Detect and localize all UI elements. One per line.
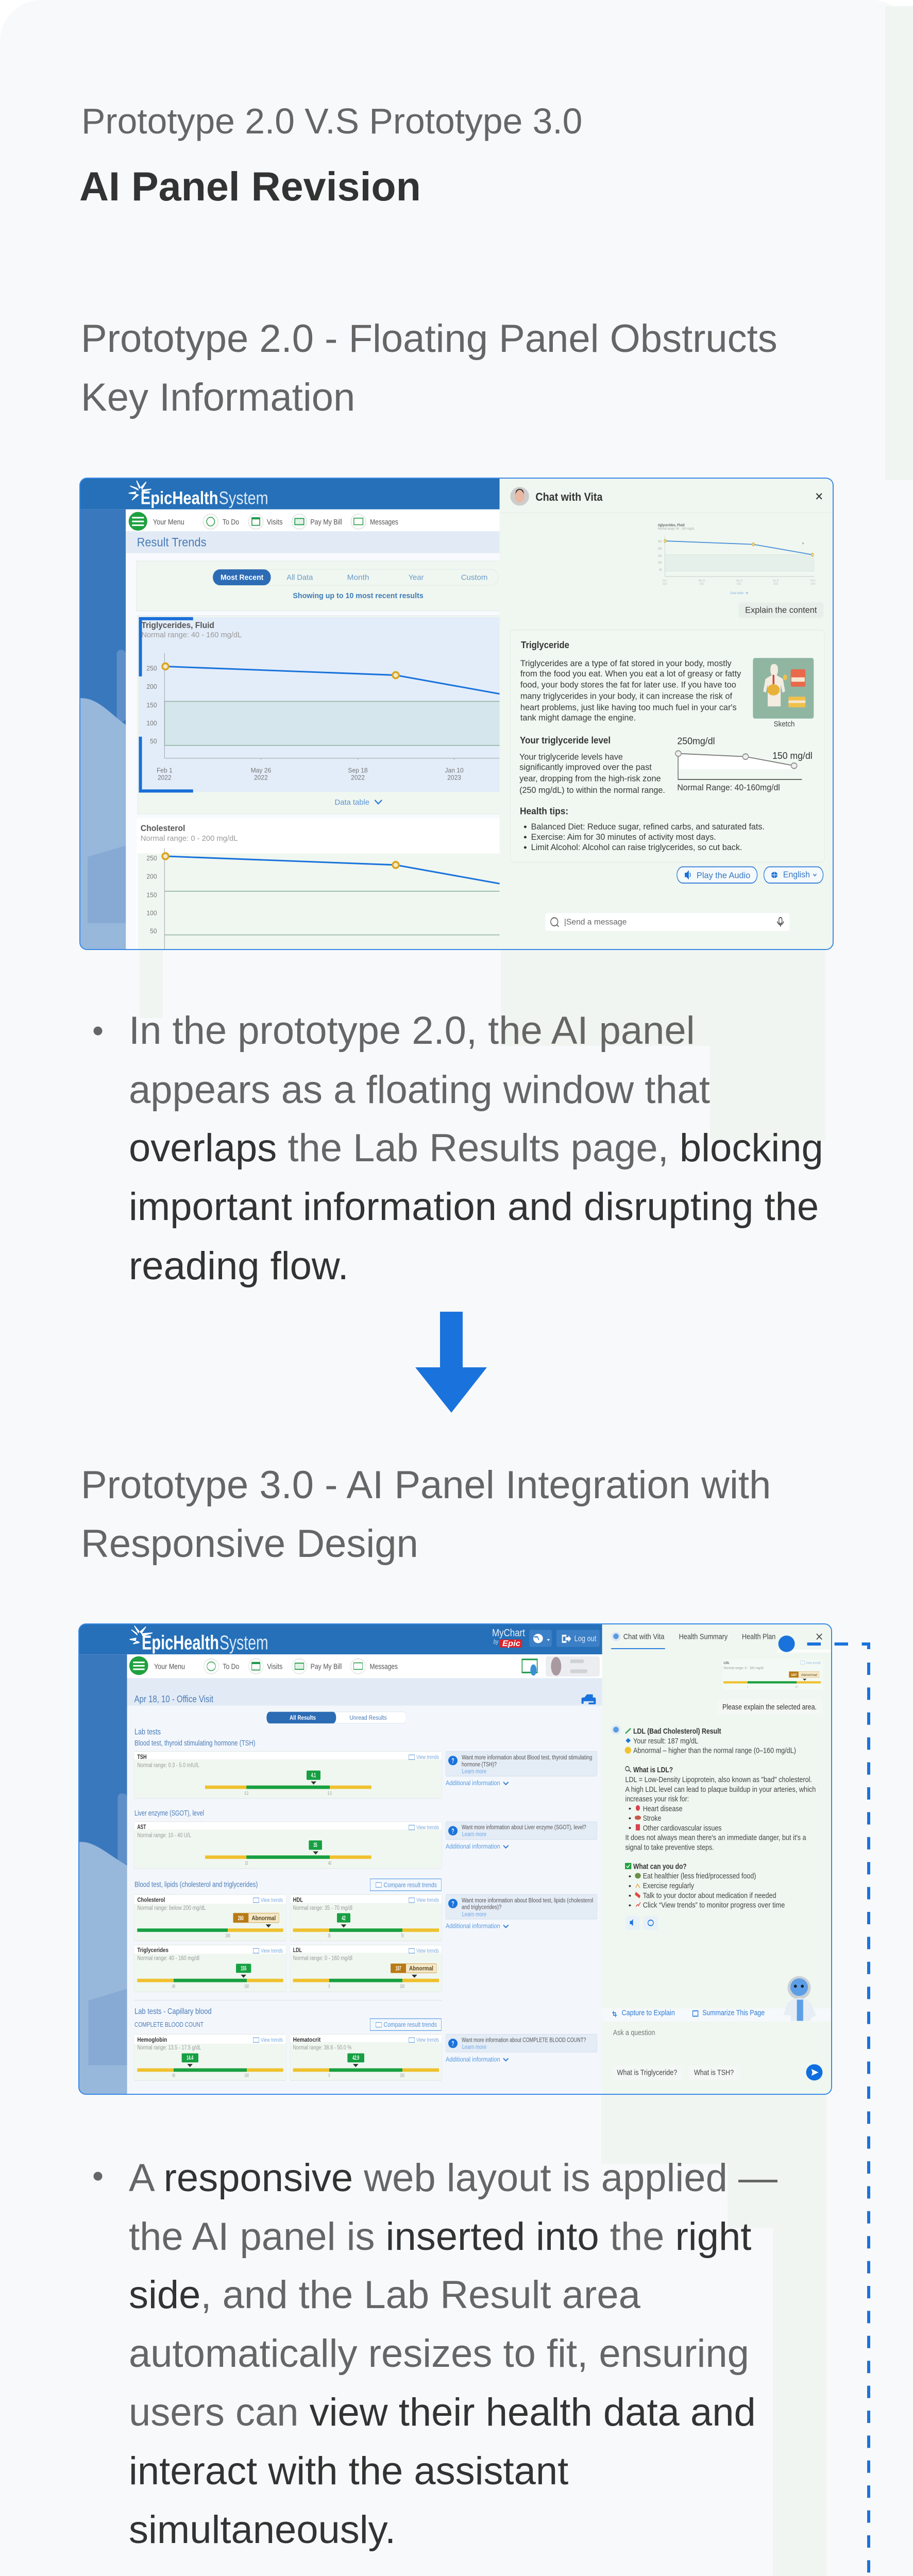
info box: lipids: ? <box>452 1900 454 1908</box>
assistant response: Talk to your doctor about medication if needed <box>643 1891 776 1900</box>
lab results page, left part: Liver enzyme (SGOT), level <box>134 1809 204 1818</box>
bullet text: prototype 2.0: reading flow. <box>129 1244 349 1288</box>
selected chart thumbnail: Normal range: 40 - 160 mg/dL <box>658 528 695 531</box>
triglycerides chart card: Feb 1 <box>157 766 173 774</box>
question input: What is Triglyceride? <box>617 2068 677 2077</box>
mini trend chart: 250mg/dl <box>677 736 715 747</box>
logo: System <box>219 1632 268 1654</box>
audio and language buttons: Play the Audio <box>697 871 750 880</box>
selected LDL thumbnail: Normal range: 0 - 160 mg/dl <box>724 1667 764 1670</box>
card: cholesterol: Cholesterol <box>137 1897 165 1904</box>
card: cholesterol: Normal range: below 200 mg/dL <box>137 1905 206 1912</box>
explanation card: tank might damage the engine. <box>520 714 636 723</box>
card: AST: 35 <box>313 1842 317 1849</box>
card: hemoglobin: 14.4 <box>187 2055 194 2062</box>
user bubble: Please explain the selected area. <box>722 1703 817 1711</box>
bullet text: prototype 2.0 <box>94 1009 823 1288</box>
cholesterol chart card: 200 <box>146 872 157 880</box>
info box: lipids: Learn more <box>462 1911 486 1918</box>
explanation card: Balanced Diet: Reduce sugar, refined carbs, and saturated fats. <box>531 822 765 832</box>
assistant response: Click “View trends” to monitor progress over time <box>643 1901 785 1909</box>
tabs <box>611 1632 831 1653</box>
explanation card: Your triglyceride level <box>520 736 611 746</box>
title block: AI Panel Revision <box>79 163 421 209</box>
assistant response: LDL = Low-Density Lipoprotein, also known as "bad" cholesterol. <box>625 1775 812 1784</box>
heading: prototype 3.0 <box>81 1463 771 1566</box>
info box: TSH: Additional information <box>446 1780 500 1787</box>
sketch illustration <box>753 658 814 719</box>
card: hemoglobin: Normal range: 13.5 - 17.5 g/dL <box>137 2044 201 2052</box>
date filter: Year <box>409 573 424 582</box>
cholesterol chart card: 150 <box>146 891 157 899</box>
selected chart thumbnail: Feb 1 <box>810 579 816 583</box>
triglycerides chart card <box>138 616 502 814</box>
triglycerides chart card: 100 <box>146 719 157 727</box>
info box: lipids: Want more information about Blood test, lipids (cholesterol <box>462 1897 593 1904</box>
lab results page, left part: Blood test, lipids (cholesterol and triglycerides) <box>134 1880 258 1889</box>
triglycerides chart card: 2023 <box>447 773 461 782</box>
selected chart thumbnail: 2022 <box>700 582 704 586</box>
navigation: Pay My Bill <box>311 1663 342 1671</box>
audio and language buttons: English <box>783 870 810 880</box>
explanation card: significantly improved over the past <box>519 763 652 772</box>
assistant response: A high LDL level can lead to plaque buildup in your arteries, which <box>625 1785 816 1793</box>
selected LDL thumbnail: 0 <box>747 1685 749 1688</box>
card: TSH: TSH <box>137 1754 147 1761</box>
cholesterol chart card <box>137 819 502 953</box>
triglycerides chart card: Sep 18 <box>348 766 368 774</box>
explanation card: Triglyceride <box>521 640 569 650</box>
info box: SGOT <box>446 1822 597 1851</box>
triglycerides chart card: 200 <box>146 683 157 690</box>
view trend links: View trends <box>416 1824 439 1831</box>
card: hemoglobin: 160 <box>244 2073 249 2078</box>
selected LDL thumbnail: 160 <box>795 1685 798 1688</box>
navigation: Pay My Bill <box>310 517 342 526</box>
card: TSH: 5.0 <box>328 1790 332 1796</box>
heading: prototype 3.0: Responsive Design <box>81 1522 418 1566</box>
card: cholesterol: View trends <box>261 1897 283 1903</box>
navigation: To Do <box>223 517 239 526</box>
assistant response: Other cardiovascular issues <box>643 1824 721 1832</box>
card: LDL: Normal range: 0 - 160 mg/dl <box>293 1955 352 1962</box>
selected chart thumbnail: Sep 18 <box>736 579 742 583</box>
card: hematocrit: 42.9 <box>352 2055 360 2062</box>
heading: prototype 2.0: Prototype 2.0 - Floating Panel Obstructs <box>81 317 777 361</box>
navigation: To Do <box>223 1663 240 1671</box>
card: hematocrit: Hematocrit <box>293 2037 321 2044</box>
print icon <box>582 1694 596 1704</box>
info box: lipids: Additional information <box>446 1922 500 1930</box>
assistant response: LDL (Bad Cholesterol) Result <box>633 1727 721 1736</box>
floating chat panel <box>500 478 835 951</box>
card: AST: 40 <box>328 1860 331 1866</box>
navigation: Messages <box>370 517 398 526</box>
mini trend chart: Normal Range: 40-160mg/dl <box>677 783 780 793</box>
info box: TSH: hormone (TSH)? <box>462 1761 497 1768</box>
user request bubble <box>746 607 817 615</box>
selected chart thumbnail: riglycerides, Fluid <box>658 523 685 528</box>
info box: lipids <box>446 1894 597 1930</box>
card: LDL: 187 <box>395 1965 401 1972</box>
card: TSH: 4.1 <box>311 1772 316 1779</box>
results toggle: All Results <box>290 1715 316 1722</box>
compare buttons: Compare result trends <box>384 1882 437 1889</box>
card: hematocrit: Normal range: 38.8 - 50.0 % <box>293 2044 352 2052</box>
card: HDL: View trends <box>416 1897 439 1903</box>
integrated chat panel <box>582 1624 833 2096</box>
mini trend chart: 150 mg/dl <box>772 751 813 761</box>
selected chart thumbnail: Data table <box>730 591 743 595</box>
question input <box>611 2028 822 2080</box>
card: cholesterol <box>134 1894 286 1941</box>
card: hematocrit: 160 <box>400 2073 405 2078</box>
cholesterol chart card: 100 <box>146 909 157 917</box>
selected chart thumbnail: May 26 <box>699 579 705 583</box>
selected LDL thumbnail: LDL <box>724 1662 730 1665</box>
heading: prototype 2.0: Key Information <box>81 376 355 419</box>
card: AST: Normal range: 10 - 40 U/L <box>137 1832 192 1839</box>
card: hematocrit <box>290 2035 442 2080</box>
tabs: Chat with Vita <box>623 1633 665 1641</box>
explanation card: Your triglyceride levels have <box>519 753 623 762</box>
assistant response: What is LDL? <box>633 1766 673 1774</box>
selected chart thumbnail: 100 <box>658 562 662 565</box>
info box: TSH: Want more information about Blood test, thyroid stimulating <box>462 1754 592 1761</box>
screenshot: prototype 2.0 floating panel <box>80 478 835 953</box>
mini trend chart <box>675 736 813 793</box>
assistant response: Heart disease <box>643 1804 683 1813</box>
results toggle: Unread Results <box>349 1715 387 1722</box>
explanation card: Limit Alcohol: Alcohol can raise triglycerides, so cut back. <box>531 843 742 852</box>
lab results page, right part <box>370 1626 600 2063</box>
selected chart thumbnail: 150 <box>658 554 662 558</box>
assistant response: Abnormal – higher than the normal range (0–160 mg/dL) <box>633 1747 796 1755</box>
mychart logo: Epic <box>502 1638 520 1648</box>
user bubble <box>717 1699 823 1715</box>
compare buttons <box>370 1879 441 2030</box>
screenshot: prototype 3.0 integrated panel <box>79 1624 833 2096</box>
card: LDL: 160 <box>400 1984 405 1989</box>
explanation card <box>510 630 824 862</box>
lab results page, left part: COMPLETE BLOOD COUNT <box>134 2021 204 2029</box>
question input: Ask a question <box>613 2028 655 2037</box>
navigation: Visits <box>267 517 283 526</box>
card: hemoglobin: 40 <box>172 2073 175 2078</box>
assistant response <box>612 1725 816 1930</box>
bullet text: prototype 3.0: the AI panel is inserted into the right <box>129 2215 751 2259</box>
language and log out buttons: Log out <box>574 1634 597 1643</box>
mychart logo: by <box>494 1639 499 1646</box>
bullet text: prototype 3.0: users can view their health data and <box>129 2391 756 2434</box>
selected chart thumbnail: 200 <box>658 547 662 551</box>
selected chart thumbnail: Jan 10 <box>773 579 779 583</box>
explanation card: Sketch <box>774 720 794 728</box>
assistant response: Exercise regularly <box>643 1882 695 1890</box>
info box: TSH: Learn more <box>462 1768 486 1775</box>
date filter <box>137 561 501 611</box>
info box: SGOT: Additional information <box>446 1843 500 1851</box>
lab results page, left part: Apr 18, 10 - Office Visit <box>134 1694 213 1705</box>
compare buttons: Compare result trends <box>384 2021 437 2029</box>
cholesterol chart card: 250 <box>146 854 157 862</box>
audio and language buttons <box>677 867 823 883</box>
selected chart thumbnail: 50 <box>660 569 662 572</box>
QR and profile <box>518 1656 600 1676</box>
screenshot 2 border <box>79 1624 832 2094</box>
navigation <box>129 1656 398 1675</box>
navigation: Messages <box>370 1663 398 1671</box>
title block: Prototype 2.0 V.S Prototype 3.0 <box>81 101 582 141</box>
screenshot 1 border <box>80 478 833 950</box>
results toggle <box>266 1712 406 1723</box>
card: triglycerides: Triglycerides <box>137 1947 169 1954</box>
explanation card: heart problems, just like having too much fuel in your car's <box>520 703 737 713</box>
card: hematocrit: 0 <box>329 2073 330 2078</box>
info box: lipids: and triglycerides)? <box>462 1904 502 1911</box>
explanation card: Exercise: Aim for 30 minutes of activity most days. <box>531 833 716 842</box>
triglycerides chart card: 250 <box>146 664 157 672</box>
question input: What is TSH? <box>694 2068 734 2077</box>
card: hematocrit: View trends <box>416 2037 439 2043</box>
chat header: Chat with Vita <box>535 491 603 504</box>
assistant response: It does not always mean there's an immediate danger, but it's a <box>625 1834 806 1842</box>
triglycerides chart card: 2022 <box>254 773 268 782</box>
info box: complete blood count: Additional information <box>446 2056 500 2063</box>
logo: EpicHealth <box>141 488 218 509</box>
assistant response: Your result: 187 mg/dL <box>633 1737 698 1745</box>
date filter: Month <box>347 573 369 582</box>
heading: prototype 2.0 <box>81 317 777 419</box>
capture and summarize actions <box>612 2009 765 2017</box>
card: triglycerides <box>134 1945 286 1992</box>
info box: SGOT: ? <box>452 1827 454 1836</box>
assistant response: What can you do? <box>633 1862 687 1871</box>
card: LDL: LDL <box>293 1947 302 1954</box>
bullet text: prototype 3.0: interact with the assistant <box>129 2449 568 2493</box>
card: TSH: 0.3 <box>245 1790 248 1796</box>
capture and summarize actions: Capture to Explain <box>622 2009 675 2017</box>
lab results page, left part <box>79 1624 643 2095</box>
logo <box>130 1625 268 1654</box>
info box: complete blood count <box>446 2035 597 2063</box>
triglycerides chart card: 150 <box>146 701 157 709</box>
bullet text: prototype 3.0: side, and the Lab Result area <box>129 2273 641 2317</box>
explanation card: food, your body stores the fat for later use. If you have too <box>520 681 736 690</box>
lab results page, left part: Lab tests <box>134 1726 161 1736</box>
date filter: All Data <box>286 573 313 582</box>
chat header <box>510 487 822 505</box>
navigation: Visits <box>267 1663 282 1671</box>
info box: complete blood count: ? <box>452 2040 454 2048</box>
explanation card: (250 mg/dL) to within the normal range. <box>519 786 665 795</box>
card: cholesterol: 260 <box>238 1915 244 1922</box>
navigation: Your Menu <box>154 1663 185 1671</box>
navigation <box>129 512 398 549</box>
bullet text: prototype 2.0: appears as a floating window that <box>129 1068 710 1112</box>
info box: complete blood count: Want more information about COMPLETE BLOOD COUNT? <box>462 2037 586 2044</box>
explanation card: many triglycerides in your body, it can increase the risk of <box>520 692 733 701</box>
heading: prototype 3.0: Prototype 3.0 - AI Panel Integration with <box>81 1463 771 1507</box>
title block <box>79 101 582 209</box>
explanation card: Health tips: <box>520 807 568 817</box>
card: AST: AST <box>137 1824 146 1831</box>
explanation card: year, dropping from the high-risk zone <box>519 774 661 784</box>
info box: SGOT: Learn more <box>462 1831 486 1838</box>
bullet text: prototype 3.0: A responsive web layout is applied — <box>129 2156 777 2200</box>
explanation card: from the food you eat. When you eat a lot of greasy or fatty <box>520 669 741 679</box>
selected chart thumbnail: Feb 1 <box>662 579 668 583</box>
selected LDL thumbnail: View trends <box>806 1662 821 1665</box>
bullet text: prototype 3.0 <box>94 2156 777 2552</box>
lab results page, left part: Lab tests - Capillary blood <box>134 2006 212 2016</box>
selected chart thumbnail: 2023 <box>773 582 778 586</box>
selected chart thumbnail: 2022 <box>663 582 667 586</box>
navigation: Result Trends <box>137 535 207 549</box>
triglycerides chart card: 50 <box>150 737 157 745</box>
cholesterol chart card: 50 <box>150 927 157 935</box>
mychart logo: MyChart <box>492 1626 525 1639</box>
assistant response: Stroke <box>643 1814 661 1823</box>
card: HDL: 70 <box>401 1933 404 1939</box>
connector: dashed arrow from panel tab to health plan <box>779 1636 870 2576</box>
card: hemoglobin <box>134 2035 286 2080</box>
triglycerides chart card: 2022 <box>351 773 365 782</box>
card: cholesterol: Abnormal <box>251 1915 276 1922</box>
card: AST <box>134 1822 442 1869</box>
triglycerides chart card: Jan 10 <box>445 766 464 774</box>
date filter: Most Recent <box>221 573 264 582</box>
card: triglycerides: Normal range: 40 - 160 mg/dl <box>137 1955 199 1962</box>
triglycerides chart card: 2022 <box>158 773 172 782</box>
mychart logo <box>492 1626 525 1648</box>
bullet text: prototype 2.0: In the prototype 2.0, the AI panel <box>129 1009 695 1053</box>
navigation: Your Menu <box>153 517 184 526</box>
card: LDL <box>290 1945 442 1992</box>
assistant response: Eat healthier (less fried/processed food) <box>643 1872 756 1880</box>
assistant response: increases your risk for: <box>625 1795 689 1803</box>
logo: System <box>219 488 268 509</box>
bottom action band <box>602 2008 832 2022</box>
card: HDL: 42 <box>342 1915 346 1922</box>
explanation card: Triglycerides are a type of fat stored in your body, mostly <box>520 659 732 669</box>
bullet text: prototype 3.0: automatically resizes to fit, ensuring <box>129 2332 749 2376</box>
arrow: down <box>415 1312 487 1413</box>
triglycerides chart card: May 26 <box>251 766 271 774</box>
card: hemoglobin: Hemoglobin <box>137 2037 167 2044</box>
lab results page, left part: Blood test, thyroid stimulating hormone (TSH) <box>134 1739 256 1748</box>
card: LDL: Abnormal <box>409 1965 433 1972</box>
card: LDL: 0 <box>329 1984 330 1989</box>
card: triglycerides: 155 <box>241 1965 247 1972</box>
language and log out buttons <box>529 1630 600 1647</box>
card: triglycerides: 40 <box>172 1984 175 1989</box>
card: HDL: 35 <box>328 1933 331 1939</box>
lab results page <box>80 478 502 953</box>
logo: EpicHealth <box>142 1632 219 1654</box>
logo <box>129 481 268 509</box>
tabs: Health Plan <box>742 1633 775 1641</box>
cholesterol chart card: Normal range: 0 - 200 mg/dL <box>141 835 238 843</box>
selected LDL thumbnail <box>722 1659 823 1690</box>
info box: TSH: ? <box>452 1757 454 1765</box>
card: HDL <box>290 1894 442 1941</box>
card: triglycerides: View trends <box>261 1947 283 1954</box>
bullet text: prototype 2.0: important information and disrupting the <box>129 1185 819 1229</box>
triglycerides chart card: Data table <box>335 798 369 807</box>
bullet text: prototype 2.0: overlaps the Lab Results page, blocking <box>129 1126 823 1170</box>
user request bubble: Explain the content <box>745 606 817 615</box>
card: HDL: Normal range: 35 - 70 mg/dl <box>293 1905 352 1912</box>
selected chart thumbnail: 2022 <box>737 582 741 586</box>
info box: SGOT: Want more information about Liver enzyme (SGOT), level? <box>462 1824 586 1831</box>
card: AST: 10 <box>245 1860 248 1866</box>
info box: TSH <box>446 1752 597 1787</box>
assistant response: signal to take preventive steps. <box>625 1843 714 1852</box>
triglycerides chart card: Triglycerides, Fluid <box>141 620 214 630</box>
card: cholesterol: 200 <box>226 1933 230 1939</box>
cholesterol chart card: Cholesterol <box>141 823 185 833</box>
view trend links <box>409 1754 439 1831</box>
selected LDL thumbnail: 187 <box>791 1673 797 1677</box>
card: triglycerides: 160 <box>244 1984 249 1989</box>
tabs: Health Summary <box>679 1633 728 1641</box>
selected chart thumbnail <box>658 523 816 595</box>
triglycerides chart card: Normal range: 40 - 160 mg/dL <box>141 631 242 639</box>
capture and summarize actions: Summarize This Page <box>702 2009 765 2017</box>
view trend links: View trends <box>416 1754 439 1760</box>
robot assistant <box>783 1976 816 2021</box>
date filter: Custom <box>461 573 487 582</box>
selected chart thumbnail: 250 <box>658 540 662 544</box>
selected LDL thumbnail: Abnormal <box>801 1673 817 1677</box>
message input: |Send a message <box>564 918 627 926</box>
card: HDL: HDL <box>293 1897 303 1904</box>
card: TSH: Normal range: 0.3 - 5.0 mIU/L <box>137 1762 200 1769</box>
card: TSH <box>134 1752 442 1799</box>
message input <box>545 913 789 931</box>
bullet text: prototype 3.0: simultaneously. <box>129 2508 396 2552</box>
date filter: Showing up to 10 most recent results <box>293 591 424 600</box>
card: hemoglobin: View trends <box>261 2037 283 2043</box>
selected chart thumbnail: 2024 <box>811 582 816 586</box>
info box: complete blood count: Learn more <box>462 2044 486 2051</box>
card: LDL: View trends <box>416 1947 439 1954</box>
